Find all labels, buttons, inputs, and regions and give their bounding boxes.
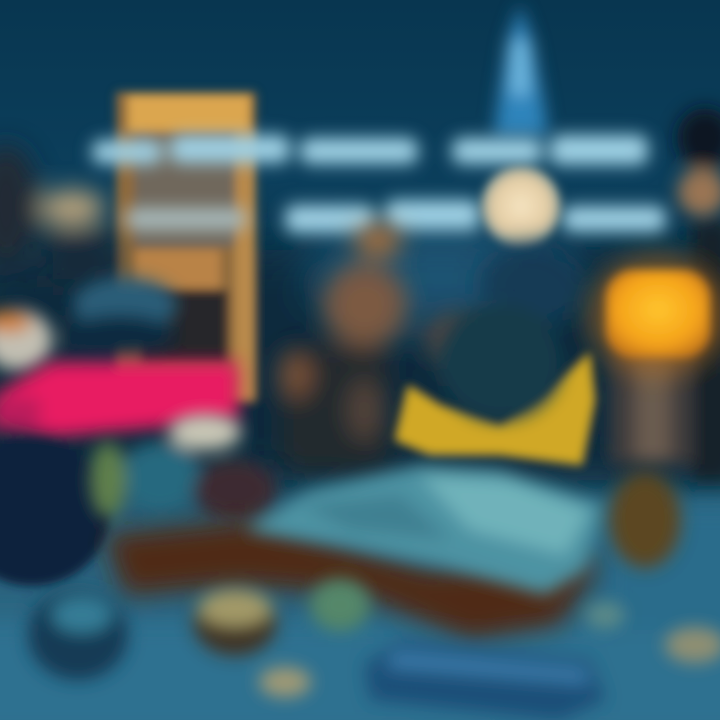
- right dark figure: [677, 108, 720, 216]
- brown book base: [105, 520, 600, 640]
- table lamp: [586, 253, 720, 377]
- pink band: [0, 362, 238, 436]
- tower: [494, 5, 548, 135]
- dark central figure body: [438, 304, 562, 420]
- mid dark background band: [0, 225, 720, 480]
- globes and objects left: [90, 414, 277, 520]
- right column under lamp: [610, 220, 720, 480]
- central figures: [279, 224, 580, 470]
- wooden panel: [116, 92, 256, 402]
- dark sphere: [0, 438, 110, 586]
- open book: [245, 465, 605, 595]
- brown object right: [609, 472, 681, 568]
- title text bands: [92, 135, 666, 233]
- light bulb: [481, 166, 561, 246]
- yellow cloth: [395, 352, 595, 465]
- blue notebook: [365, 640, 605, 720]
- table surface: [0, 500, 720, 720]
- small stones: [193, 579, 720, 697]
- left background figure: [0, 145, 115, 287]
- teal globe bottom left: [28, 590, 128, 680]
- left stack of objects: [0, 277, 177, 370]
